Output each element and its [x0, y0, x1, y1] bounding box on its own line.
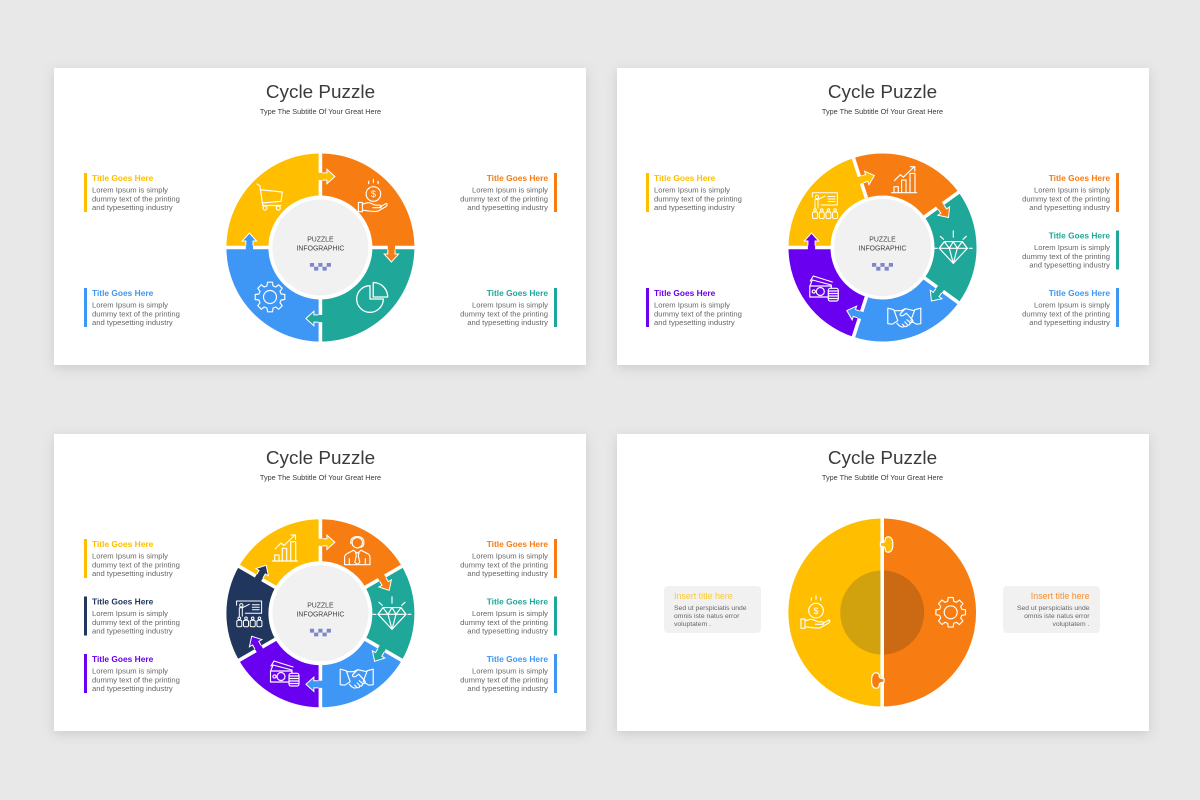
text block: navy: and typesetting industry [92, 627, 173, 636]
text block: yellow [84, 173, 180, 212]
text block: teal [460, 596, 557, 636]
callout: left [664, 586, 761, 633]
text block: teal: and typesetting industry [467, 318, 548, 327]
arrow: teal to blue [368, 643, 389, 665]
icon: shopping cart [257, 184, 282, 210]
text block: yellow: Lorem Ipsum is simply [92, 552, 168, 561]
icon: money [810, 276, 838, 301]
text block: orange: dummy text of the printing [460, 560, 548, 569]
text block: yellow [646, 173, 742, 212]
text block: navy: Lorem Ipsum is simply [92, 609, 168, 618]
text block: yellow: and typesetting industry [92, 569, 173, 578]
text block: yellow: and typesetting industry [92, 203, 173, 212]
arrow: blue to yellow [242, 233, 257, 250]
callout: left: voluptatem . [674, 621, 711, 628]
title: Cycle Puzzle [828, 448, 937, 469]
text block: orange: Title Goes Here [1049, 173, 1110, 183]
arrow: purple to navy [245, 633, 266, 655]
puzzle wheel [226, 517, 414, 709]
text block: yellow: Lorem Ipsum is simply [654, 186, 730, 195]
text block: purple: Title Goes Here [92, 654, 154, 664]
segment: yellow [788, 158, 867, 248]
text block: teal: Lorem Ipsum is simply [472, 609, 548, 618]
text block: yellow: Title Goes Here [92, 173, 154, 183]
text block: teal: Lorem Ipsum is simply [472, 301, 548, 310]
icon: gear [255, 282, 285, 312]
card background [617, 68, 1149, 365]
text block: purple: Lorem Ipsum is simply [92, 667, 168, 676]
card background [617, 434, 1149, 731]
text block: orange [460, 539, 557, 578]
text block: teal: Title Goes Here [1049, 230, 1110, 240]
subtitle: Type The Subtitle Of Your Great Here [822, 473, 943, 482]
arrow: yellow to orange [856, 169, 877, 188]
icon: handshake [340, 669, 373, 688]
callout: right [1003, 586, 1100, 633]
title: Cycle Puzzle [266, 82, 375, 103]
hub [268, 561, 372, 665]
segment: purple [239, 638, 320, 707]
panel: two-piece puzzle [617, 434, 1149, 731]
text block: orange: and typesetting industry [467, 203, 548, 212]
text block: purple: and typesetting industry [654, 318, 735, 327]
text block: yellow: dummy text of the printing [92, 194, 180, 203]
text block: blue [84, 288, 180, 327]
icon: gear [936, 598, 966, 627]
icon: growth chart [272, 535, 297, 561]
text block: teal: and typesetting industry [467, 627, 548, 636]
hub: INFOGRAPHIC [859, 246, 906, 252]
text block: orange: Lorem Ipsum is simply [1034, 186, 1110, 195]
arrow: orange to teal [374, 572, 395, 594]
text block: teal: dummy text of the printing [460, 309, 548, 318]
arrow: orange to teal [933, 200, 954, 222]
card background [54, 68, 586, 365]
half: yellow [788, 519, 880, 706]
segment: navy [226, 566, 277, 660]
icon: presentation [237, 601, 262, 627]
subtitle: Type The Subtitle Of Your Great Here [822, 107, 943, 116]
arrow: blue to purple [845, 304, 865, 323]
text block: teal: Title Goes Here [487, 596, 548, 606]
text block: orange: Title Goes Here [487, 173, 548, 183]
text block: yellow: Title Goes Here [654, 173, 716, 183]
segment: orange [320, 154, 414, 248]
text block: navy: Title Goes Here [92, 596, 154, 606]
hub [268, 196, 372, 300]
title: Cycle Puzzle [828, 82, 937, 103]
text block: blue: Title Goes Here [487, 654, 548, 664]
segment: blue [853, 277, 959, 342]
text block: yellow [84, 539, 180, 578]
icon: pie chart [357, 282, 388, 312]
puzzle knob: orange [872, 673, 884, 688]
text block: teal: Title Goes Here [487, 288, 548, 298]
text block: purple: dummy text of the printing [654, 309, 742, 318]
text block: purple: dummy text of the printing [92, 675, 180, 684]
text block: teal: and typesetting industry [1029, 261, 1110, 270]
arrow: navy to yellow [251, 562, 272, 584]
text block: orange: dummy text of the printing [1022, 194, 1110, 203]
text block: orange [1022, 173, 1119, 212]
text block: purple [646, 288, 742, 327]
hub: PUZZLE [307, 236, 334, 244]
text block: orange: Lorem Ipsum is simply [472, 552, 548, 561]
icon: presentation [812, 193, 838, 218]
icon: money [270, 661, 299, 686]
text block: orange: Lorem Ipsum is simply [472, 186, 548, 195]
text block: teal [460, 288, 557, 327]
text block: teal: Lorem Ipsum is simply [1034, 243, 1110, 252]
segment: yellow [239, 519, 320, 588]
hub: INFOGRAPHIC [296, 611, 344, 618]
panel: five-segment cycle puzzle [617, 68, 1149, 365]
arrow: teal to blue [926, 283, 947, 305]
callout: right: Sed ut perspiciatis unde [1017, 605, 1090, 612]
center circle: right half [884, 571, 924, 654]
segment: yellow [226, 154, 320, 248]
segment: teal [364, 566, 414, 660]
icon: business person [345, 536, 370, 565]
text block: blue: and typesetting industry [1029, 318, 1110, 327]
callout: left: Insert title here [674, 591, 733, 601]
text block: blue: Lorem Ipsum is simply [472, 667, 548, 676]
text block: blue: and typesetting industry [92, 318, 173, 327]
segment: purple [788, 248, 867, 337]
card background [54, 434, 586, 731]
text block: teal [1022, 230, 1119, 270]
segment: teal [923, 192, 977, 303]
text block: purple: Lorem Ipsum is simply [654, 301, 730, 310]
panel: four-segment cycle puzzle [54, 68, 586, 365]
text block: purple [84, 654, 180, 693]
text block: blue: Lorem Ipsum is simply [92, 301, 168, 310]
callout: right: voluptatem . [1052, 621, 1090, 628]
callout: left: omnis iste natus error [674, 613, 740, 620]
segment: blue [226, 248, 320, 342]
puzzle knob: yellow [880, 537, 893, 552]
text block: navy: dummy text of the printing [92, 618, 180, 627]
arrow: orange to teal [384, 245, 399, 262]
arrow: purple to yellow [804, 233, 819, 250]
text block: orange: and typesetting industry [1029, 203, 1110, 212]
text block: purple: and typesetting industry [92, 684, 173, 693]
icon: hand with coin [358, 179, 387, 212]
hub: PUZZLE [869, 236, 896, 244]
segment: blue [320, 638, 402, 707]
text block: orange: dummy text of the printing [460, 194, 548, 203]
text block: blue: dummy text of the printing [92, 309, 180, 318]
icon: growth chart [892, 167, 917, 193]
arrow: yellow to orange [318, 535, 335, 550]
text block: blue: Lorem Ipsum is simply [1034, 301, 1110, 310]
hub: PUZZLE [307, 602, 334, 609]
icon: handshake [888, 308, 921, 327]
text block: blue: Title Goes Here [92, 288, 154, 298]
arrow: teal to blue [306, 311, 323, 326]
callout: left: Sed ut perspiciatis unde [674, 605, 747, 612]
text block: yellow: Title Goes Here [92, 539, 154, 549]
text block: yellow: dummy text of the printing [92, 560, 180, 569]
callout: right: omnis iste natus error [1024, 613, 1090, 620]
text block: blue [460, 654, 557, 693]
text block: orange: and typesetting industry [467, 569, 548, 578]
half: orange [884, 519, 976, 706]
text block: blue: dummy text of the printing [1022, 309, 1110, 318]
text block: yellow: dummy text of the printing [654, 194, 742, 203]
puzzle wheel [224, 152, 416, 344]
text block: blue: Title Goes Here [1049, 288, 1110, 298]
text block: blue: and typesetting industry [467, 684, 548, 693]
segment: teal [320, 248, 414, 342]
icon: hand with coin [801, 596, 830, 628]
text block: teal: dummy text of the printing [1022, 252, 1110, 261]
text block: purple: Title Goes Here [654, 288, 716, 298]
text block: yellow: and typesetting industry [654, 203, 735, 212]
arrow: blue to purple [306, 677, 323, 692]
title: Cycle Puzzle [266, 448, 375, 469]
hub: INFOGRAPHIC [296, 246, 344, 252]
text block: orange: Title Goes Here [487, 539, 548, 549]
subtitle: Type The Subtitle Of Your Great Here [260, 473, 381, 482]
panel: six-segment cycle puzzle [54, 434, 586, 731]
hub [830, 196, 934, 300]
text block: yellow: Lorem Ipsum is simply [92, 186, 168, 195]
icon: hand with coin: $ [371, 189, 376, 199]
text block: blue [1022, 288, 1119, 327]
center circle: left half [840, 571, 880, 654]
arrow: yellow to orange [318, 169, 335, 184]
callout: right: Insert title here [1031, 591, 1090, 601]
text block: blue: dummy text of the printing [460, 675, 548, 684]
segment: orange [853, 153, 959, 218]
icon: diamond [373, 597, 411, 629]
segment: orange [320, 519, 402, 588]
text block: navy [84, 596, 180, 636]
icon: hand with coin: $ [813, 606, 819, 616]
subtitle: Type The Subtitle Of Your Great Here [260, 107, 381, 116]
icon: diamond [934, 231, 972, 263]
puzzle wheel [786, 153, 977, 342]
text block: teal: dummy text of the printing [460, 618, 548, 627]
text block: orange [460, 173, 557, 212]
